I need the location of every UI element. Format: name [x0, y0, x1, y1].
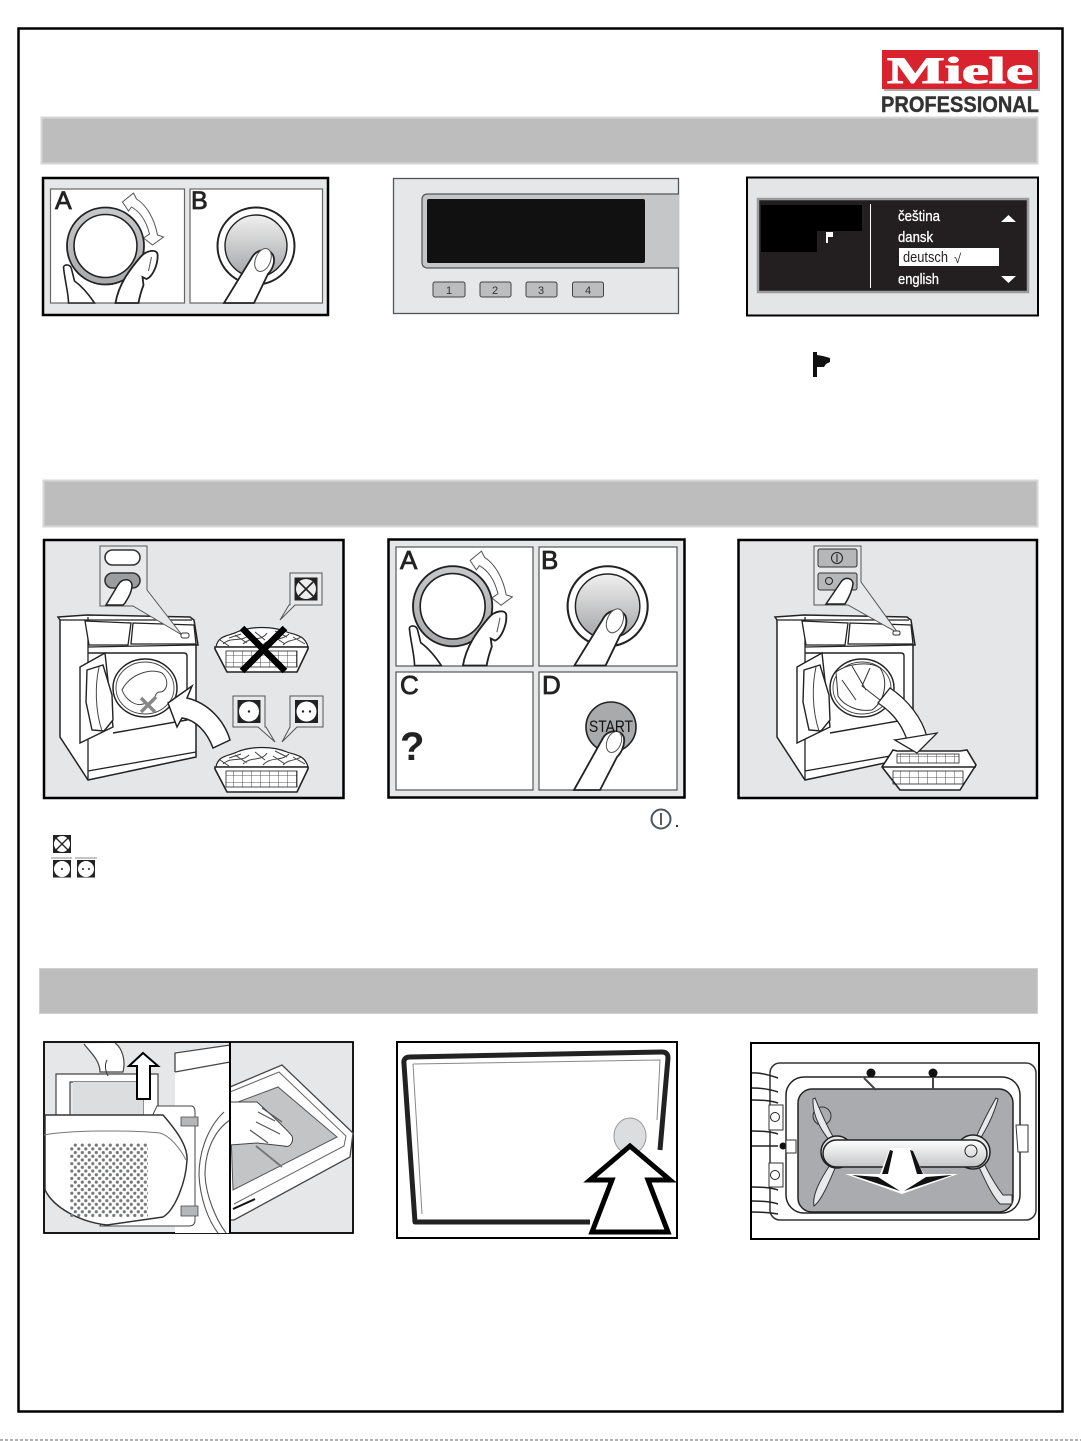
panel: display with four buttons: 2	[492, 285, 498, 297]
bottom scan edge	[0, 1439, 1081, 1441]
panel: language menu display: dansk	[898, 229, 933, 246]
panel: language menu display: english	[898, 271, 939, 288]
panel: dial A and B	[43, 178, 328, 315]
panel: unloading dry laundry	[738, 540, 1037, 798]
panel: programme selection steps A to D: A	[400, 545, 418, 575]
panel: programme selection steps A to D: ?	[400, 725, 424, 769]
panel: programme selection steps A to D	[388, 540, 684, 798]
panel: display with four buttons: 1	[446, 285, 452, 297]
heading bar 1	[42, 118, 1038, 164]
heading bar 3	[40, 968, 1038, 1014]
panel: loading laundry by care symbol	[44, 540, 344, 798]
panel: language menu display: čeština	[898, 208, 941, 225]
logo: Miele Professional	[881, 50, 1040, 117]
panel: language menu display	[747, 178, 1038, 316]
panel: programme selection steps A to D: C	[400, 670, 419, 700]
panel: display with four buttons: 3	[538, 285, 544, 297]
panel: cleaning the lint filter	[44, 1042, 353, 1233]
icon: power symbol	[652, 810, 678, 828]
icon: flag	[813, 352, 830, 377]
logo: Miele Professional: Miele	[887, 51, 1033, 92]
panel: language menu display: deutsch	[903, 249, 948, 266]
panel: language menu display: √	[954, 251, 962, 266]
panel: programme selection steps A to D: D	[542, 670, 561, 700]
panel: programme selection steps A to D: B	[541, 545, 558, 575]
panel: dial A and B: A	[55, 187, 72, 215]
heading bar 2	[44, 480, 1038, 526]
logo: Miele Professional: PROFESSIONAL	[881, 92, 1039, 117]
panel: programme selection steps A to D: START	[589, 717, 633, 736]
panel: dial A and B: B	[191, 187, 208, 215]
panel: door seal and arrow	[397, 1042, 677, 1238]
panel: display with four buttons: 4	[585, 285, 591, 297]
legend icons: care symbols	[51, 835, 97, 878]
panel: inner filter with release lever	[751, 1043, 1039, 1239]
panel: display with four buttons	[394, 178, 679, 314]
